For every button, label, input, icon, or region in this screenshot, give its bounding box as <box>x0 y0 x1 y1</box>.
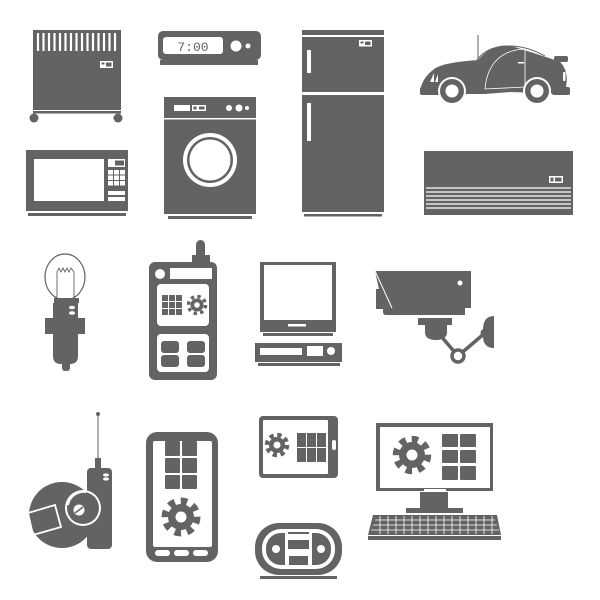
icon: video camera with disc <box>28 412 112 549</box>
icon: heater <box>30 30 122 122</box>
icon: boombox <box>255 523 342 579</box>
icon: tv and dvd player <box>255 262 342 366</box>
icon: microwave <box>26 150 128 216</box>
icon: washing machine <box>164 97 256 219</box>
icon: desktop computer <box>368 423 501 540</box>
icon: security camera <box>375 271 494 362</box>
icon: fridge <box>302 30 384 216</box>
icon: clock <box>158 31 261 65</box>
icon: smartphone <box>146 432 218 562</box>
icon: remote control <box>149 240 217 380</box>
icon: tablet <box>259 416 338 478</box>
icon: air conditioner <box>424 151 573 215</box>
icon: car <box>420 35 570 105</box>
icon: light bulb <box>45 254 85 371</box>
icon: clock: 7:00 <box>177 40 209 55</box>
